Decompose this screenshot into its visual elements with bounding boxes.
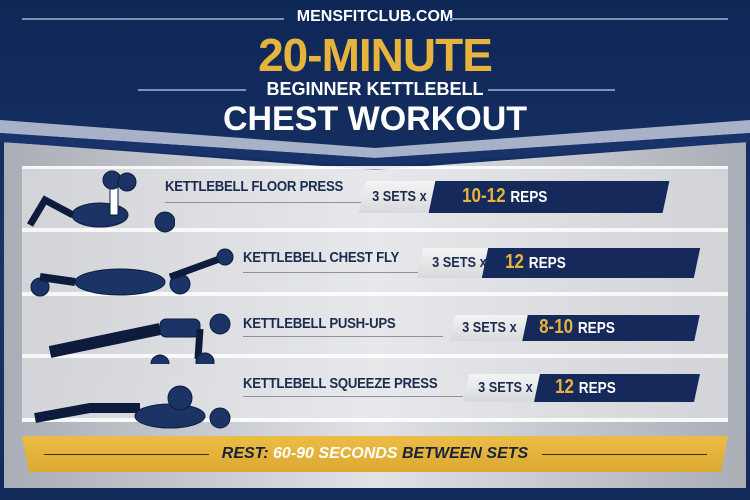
sets badge — [449, 315, 539, 341]
exercise name: KETTLEBELL SQUEEZE PRESS — [243, 375, 437, 392]
figure: chest fly — [30, 248, 234, 296]
row 2 — [30, 248, 700, 296]
title 20-minute: 20-MINUTE — [258, 29, 492, 81]
header — [22, 8, 728, 138]
site name: MENSFITCLUB.COM — [297, 8, 453, 25]
rest banner: REST: 60-90 SECONDS BETWEEN SETS — [222, 445, 528, 462]
exercise name: KETTLEBELL CHEST FLY — [243, 249, 399, 266]
sets badge: 3 SETS x — [372, 188, 427, 205]
sets badge — [463, 374, 549, 402]
exercise name: KETTLEBELL PUSH-UPS — [243, 315, 395, 332]
figure: push-ups — [48, 314, 230, 364]
row 4: 12 REPS — [555, 376, 616, 398]
sets badge: 3 SETS x — [478, 379, 533, 396]
sets badge — [359, 181, 445, 213]
row 3 — [48, 314, 700, 364]
subtitle: BEGINNER KETTLEBELL — [266, 79, 484, 99]
sets badge: 3 SETS x — [462, 319, 517, 336]
sets badge — [417, 248, 499, 278]
figure: squeeze press — [34, 386, 230, 428]
rest banner — [22, 436, 728, 472]
row 3: 8-10 REPS — [539, 316, 615, 338]
figure: floor press — [27, 170, 175, 232]
title chest workout: CHEST WORKOUT — [223, 100, 527, 138]
row 1: 10-12 REPS — [462, 185, 547, 207]
row 1 — [27, 170, 670, 232]
sets badge: 3 SETS x — [432, 254, 487, 271]
row 2: 12 REPS — [505, 251, 566, 273]
exercise name: KETTLEBELL FLOOR PRESS — [165, 178, 343, 195]
row 4 — [34, 374, 700, 428]
